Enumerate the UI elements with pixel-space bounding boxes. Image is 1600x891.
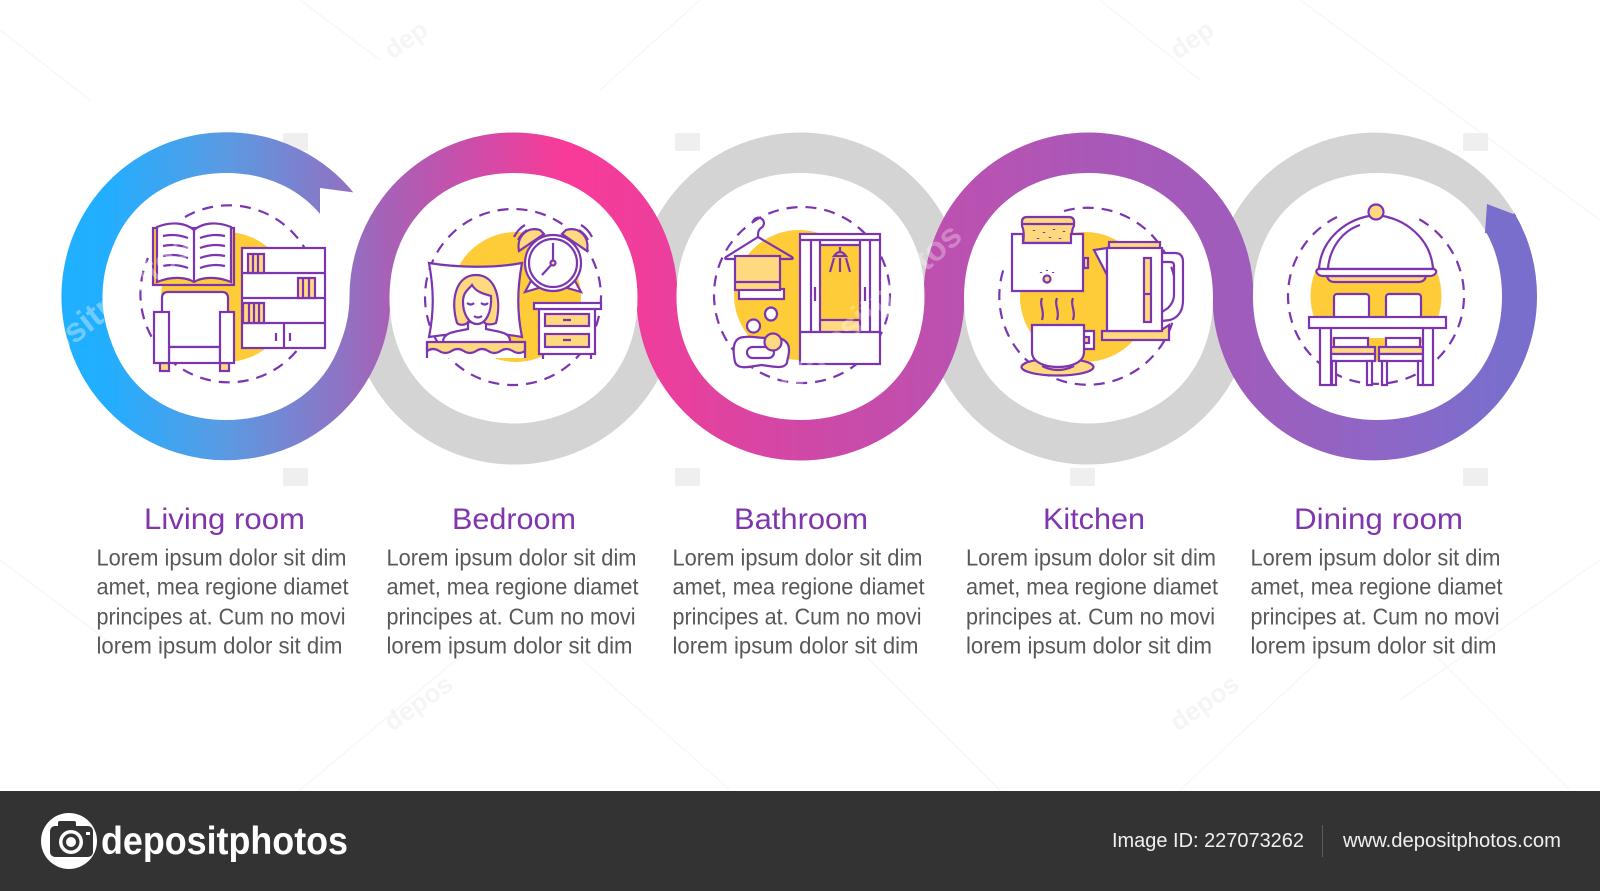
shower cabin — [800, 234, 880, 364]
body text: lorem ipsum dolor sit dim — [672, 632, 918, 658]
nightstand — [534, 303, 601, 359]
body text: lorem ipsum dolor sit dim — [966, 632, 1212, 658]
soap and bubbles — [734, 308, 789, 367]
body text: principes at. Cum no movi — [386, 604, 636, 630]
body text: principes at. Cum no movi — [96, 604, 346, 630]
body text: Lorem ipsum dolor sit dim — [966, 544, 1216, 570]
gradient ribbon — [82, 153, 1517, 440]
body text: amet, mea regione diamet — [386, 574, 639, 600]
body text: lorem ipsum dolor sit dim — [96, 632, 342, 658]
icon: bedroom — [425, 209, 601, 385]
body text: amet, mea regione diamet — [1250, 574, 1503, 600]
toaster — [1012, 217, 1088, 291]
body text — [96, 544, 349, 658]
column 3: Bathroom — [672, 503, 925, 658]
body text: lorem ipsum dolor sit dim — [1250, 632, 1496, 658]
body text — [386, 544, 639, 658]
body text: amet, mea regione diamet — [672, 574, 925, 600]
grey background rings — [370, 153, 1516, 444]
logo wordmark: depositphotos — [101, 820, 348, 863]
inner white ovals — [104, 173, 1502, 423]
column 2: Bedroom — [386, 503, 639, 658]
column 5: Dining room — [1250, 503, 1503, 658]
body text — [1250, 544, 1503, 658]
watermark text over artwork: depos — [1164, 668, 1244, 737]
heading: Bathroom — [734, 503, 868, 536]
watermark text over artwork: depos — [378, 668, 458, 737]
website: www.depositphotos.com — [1342, 830, 1561, 852]
serving cloche — [1316, 204, 1436, 282]
body text: principes at. Cum no movi — [1250, 604, 1500, 630]
body text: Lorem ipsum dolor sit dim — [96, 544, 346, 570]
body text: amet, mea regione diamet — [96, 574, 349, 600]
body text: lorem ipsum dolor sit dim — [386, 632, 632, 658]
icon: living room — [140, 205, 325, 382]
book — [153, 223, 234, 285]
heading: Dining room — [1294, 503, 1463, 536]
body text: amet, mea regione diamet — [966, 574, 1219, 600]
towel on hanger — [725, 218, 793, 299]
body text: Lorem ipsum dolor sit dim — [1250, 544, 1500, 570]
image id: Image ID: 227073262 — [1112, 830, 1304, 852]
body text — [966, 544, 1219, 658]
body text — [672, 544, 925, 658]
column 1: Living room — [96, 503, 349, 658]
footer bar — [0, 791, 1600, 891]
arrow: start notch — [320, 188, 358, 222]
watermark text over artwork: dep — [378, 14, 433, 65]
arrow: end tip — [1485, 204, 1516, 236]
blanket — [427, 342, 525, 358]
heading: Living room — [144, 503, 305, 536]
icon: dining room — [1288, 204, 1464, 385]
icon: kitchen — [999, 208, 1183, 385]
watermark text over artwork: dep — [1164, 14, 1219, 65]
electric kettle — [1094, 242, 1183, 340]
body text: Lorem ipsum dolor sit dim — [672, 544, 922, 570]
alarm clock — [514, 225, 592, 292]
body text: Lorem ipsum dolor sit dim — [386, 544, 636, 570]
icon: bathroom — [714, 207, 890, 383]
watermark: camera marks — [283, 133, 1488, 486]
bookshelf — [242, 248, 325, 348]
armchair — [154, 292, 234, 371]
pillow — [429, 263, 522, 337]
sleeping woman — [443, 275, 510, 342]
icon: logo camera — [41, 813, 97, 869]
column 4: Kitchen — [966, 503, 1219, 658]
watermark text over artwork — [0, 14, 1244, 737]
table and chairs — [1309, 294, 1446, 385]
coffee cup — [1022, 298, 1094, 376]
heading: Kitchen — [1043, 503, 1145, 536]
body text: principes at. Cum no movi — [966, 604, 1215, 630]
watermark text over artwork: depositphotos — [770, 216, 969, 401]
body text: principes at. Cum no movi — [672, 604, 922, 630]
heading: Bedroom — [452, 503, 576, 536]
